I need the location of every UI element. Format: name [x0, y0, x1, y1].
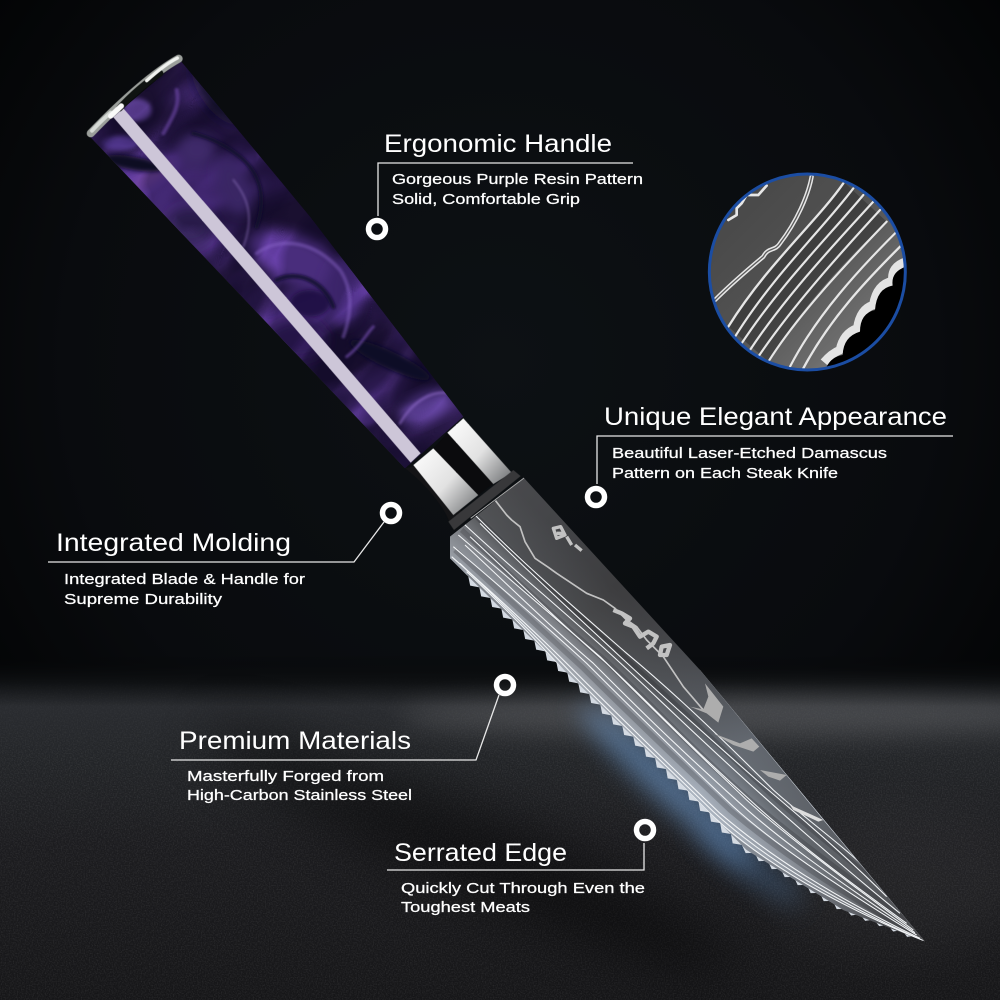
- callout: premium materials: High-Carbon Stainless Steel: [187, 787, 412, 804]
- darker band between lines: [728, 182, 887, 362]
- etched wave and stamp marks: [495, 500, 703, 710]
- knife handle: [86, 54, 520, 530]
- callout: integrated molding: [48, 504, 400, 608]
- callout: ergonomic handle: Solid, Comfortable Grip: [392, 191, 580, 208]
- serrated teeth: [468, 577, 925, 942]
- callout: unique elegant appearance: Pattern on Each Steak Knife: [612, 465, 838, 482]
- callout: premium materials: Masterfully Forged from: [187, 768, 384, 785]
- callout: serrated edge: Serrated Edge: [394, 839, 567, 867]
- callout: integrated molding: Integrated Blade & Handle for: [64, 571, 305, 588]
- callout: premium materials: [171, 676, 514, 804]
- callout: serrated edge: [387, 822, 654, 916]
- metal end cap: [91, 58, 179, 133]
- damascus pattern lines: [452, 513, 923, 941]
- damascus bands: [455, 517, 923, 943]
- knife blade: [450, 478, 925, 943]
- serrated edge in detail: [824, 262, 906, 362]
- metal bolster: [405, 418, 521, 530]
- callout: integrated molding: Integrated Molding: [56, 529, 291, 557]
- resin marbling: [90, 62, 463, 468]
- callout: unique elegant appearance: [588, 403, 953, 506]
- callout: premium materials: Premium Materials: [179, 727, 411, 755]
- white resin stripe: [113, 108, 421, 463]
- callout: serrated edge: Toughest Meats: [401, 899, 530, 916]
- callout: unique elegant appearance: Beautiful Laser-Etched Damascus: [612, 445, 887, 462]
- knife: [86, 54, 925, 942]
- callout: ergonomic handle: Gorgeous Purple Resin Pattern: [392, 171, 643, 188]
- background: [0, 290, 1000, 1000]
- callout: ergonomic handle: Ergonomic Handle: [384, 130, 612, 158]
- callout: unique elegant appearance: Unique Elegant Appearance: [604, 403, 947, 431]
- callout: integrated molding: Supreme Durability: [64, 591, 223, 608]
- magnified blade detail: [708, 172, 907, 372]
- callout: serrated edge: Quickly Cut Through Even the: [401, 880, 645, 897]
- callout: ergonomic handle: [368, 130, 643, 238]
